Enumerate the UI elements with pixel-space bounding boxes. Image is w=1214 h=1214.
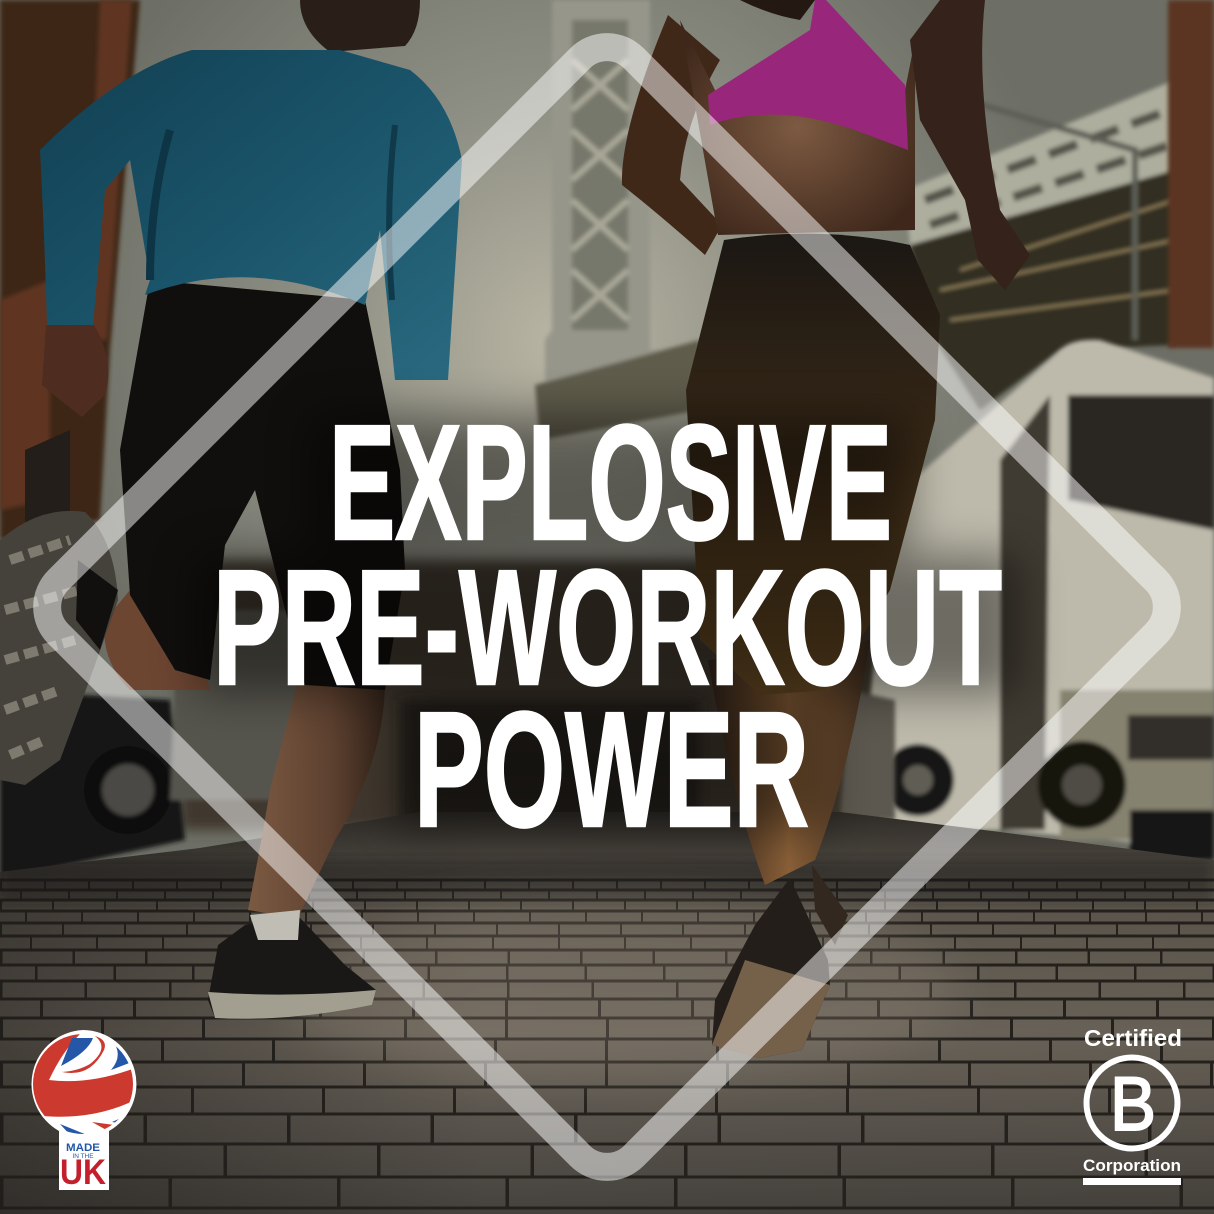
delivery truck: [870, 340, 1214, 860]
man's standing calf: [248, 680, 385, 918]
woman's shorts: [686, 234, 940, 695]
corporation label: Corporation: [1083, 1156, 1181, 1175]
badge white outline: [31, 1030, 136, 1190]
woman's back: [680, 20, 915, 235]
woman's calves: [708, 640, 870, 885]
runner: man in blue top: [0, 0, 462, 1019]
bridge tower: [535, 0, 720, 440]
icon: union jack globe: [33, 1034, 137, 1137]
man's blue top: [40, 50, 462, 380]
warm street haze: [180, 560, 900, 830]
man's head: [300, 0, 420, 52]
woman's magenta top: [708, 0, 908, 150]
man's shoe: [208, 910, 376, 1019]
headline line 3: POWER: [414, 678, 809, 861]
brick pavement: [0, 810, 1214, 1214]
woman's arm left: [622, 15, 722, 255]
certified label: Certified: [1084, 1025, 1182, 1051]
badge: made in the UK: [31, 1030, 137, 1192]
badge text: made in the: MADE: [66, 1142, 100, 1154]
man's shorts: [120, 280, 405, 690]
woman's hair and neck: [740, 0, 815, 20]
underline bar: [1083, 1178, 1181, 1185]
badge: certified B corporation: [1083, 1025, 1182, 1185]
badge: made in the UK: IN THE: [72, 1153, 94, 1160]
runner: woman in magenta top: [622, 0, 1030, 1058]
woman's shoes: [712, 865, 848, 1058]
left brick building: [0, 0, 140, 540]
woman's arm right: [910, 0, 1030, 290]
right brick building: [1168, 0, 1214, 348]
headline: [213, 391, 1002, 861]
elevated bridge on the right: [905, 80, 1175, 410]
icon: B in circle: [1086, 1058, 1178, 1148]
sky: [0, 0, 1214, 900]
dark shadow behind headline: [195, 415, 1020, 830]
man's hand: [42, 325, 108, 417]
man's rear leg and lifted shoe: [0, 511, 210, 785]
badge text: UK: UK: [60, 1153, 106, 1192]
parked cars: [0, 610, 895, 880]
icon: B in circle: B: [1110, 1062, 1156, 1147]
